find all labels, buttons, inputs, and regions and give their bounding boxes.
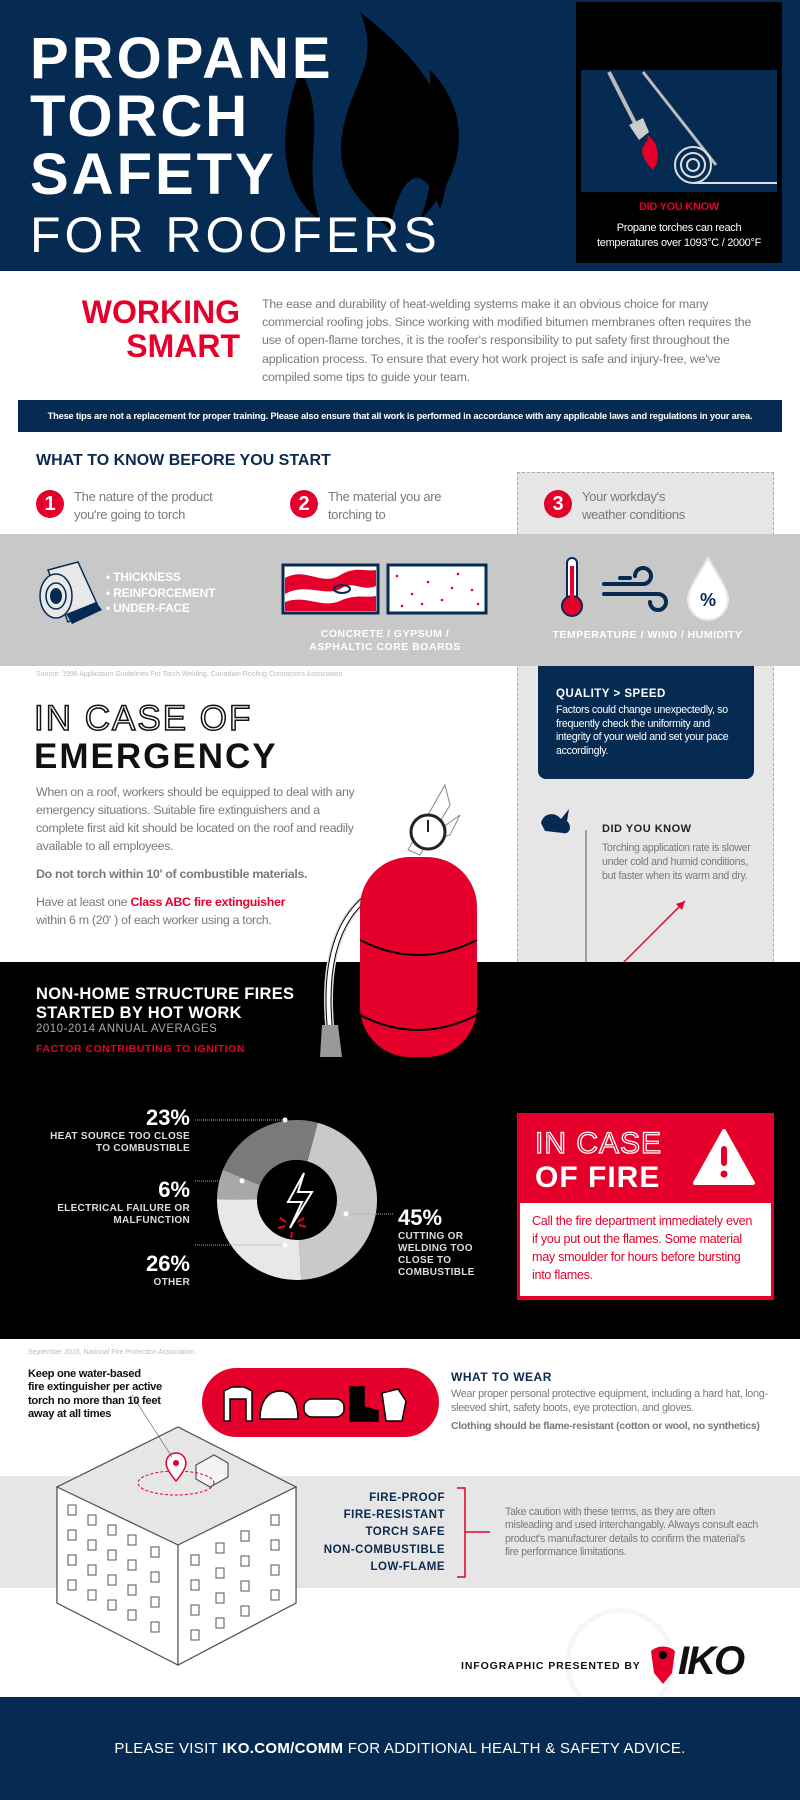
working smart heading: WORKING	[82, 294, 240, 330]
step 2: The material you are	[328, 489, 441, 504]
icon: membrane roll	[39, 561, 102, 624]
step 2: torching to	[328, 507, 385, 522]
label: 26%: OTHER	[154, 1277, 190, 1288]
source note: Source: 1996 Application Guidelines For Torch Welding, Canadian Roofing Contractors Association	[36, 671, 342, 678]
working smart heading	[82, 294, 240, 364]
text: roll properties	[106, 570, 216, 615]
in case of fire panel	[517, 1113, 774, 1300]
building illustration	[56, 1394, 298, 1666]
icon: warning	[693, 1128, 756, 1185]
label: 26%	[146, 1251, 190, 1288]
working smart heading: SMART	[126, 328, 240, 364]
did you know: rate chart: DID YOU KNOW	[602, 823, 692, 835]
did you know text	[597, 201, 761, 249]
column 3 background	[517, 472, 774, 1057]
title: FOR ROOFERS	[30, 207, 441, 263]
step 1: 1	[44, 493, 56, 515]
callout: keep extinguisher: fire extinguisher per active	[28, 1381, 162, 1393]
title: SAFETY	[30, 142, 277, 207]
intro paragraph: The ease and durability of heat-welding systems make it an obvious choice for many commercial roofing jobs. Since working with modified bitumen membranes often requires the use of open-flame torches, it is the roofer's responsibility to put safety first throughout the application process. To ensure that every hot work project is safe and injury-free, we've compiled some tips to guide your team.	[262, 297, 751, 384]
label: 45%: WELDING TOO	[398, 1243, 473, 1254]
PPE icons pill	[202, 1368, 439, 1437]
footer: PLEASE VISIT IKO.COM/COMM FOR ADDITIONAL HEALTH & SAFETY ADVICE.	[114, 1740, 686, 1757]
donut chart	[195, 1118, 393, 1280]
gray factors band	[0, 534, 800, 666]
label: 6%: MALFUNCTION	[113, 1215, 190, 1226]
icons: weather	[561, 556, 729, 621]
in case of emergency heading	[34, 699, 278, 776]
did you know: rate chart: Torching application rate is slower under cold and humid conditions, but faster when its warm and dry.	[602, 842, 750, 882]
caption: materials: CONCRETE / GYPSUM /	[321, 628, 449, 640]
icon: black flame	[285, 12, 459, 230]
label: 6%: ELECTRICAL FAILURE OR	[57, 1203, 190, 1214]
terms list: NON-COMBUSTIBLE	[324, 1544, 445, 1556]
heading: OF FIRE	[535, 1161, 660, 1194]
step 1: you're going to torch	[74, 507, 185, 522]
illustration: torch and roll	[581, 70, 777, 192]
terms list: TORCH SAFE	[365, 1526, 445, 1538]
IKO logo	[651, 1639, 744, 1684]
caption: weather: TEMPERATURE / WIND / HUMIDITY	[553, 629, 742, 641]
watermark seal	[565, 1608, 675, 1718]
callout: keep extinguisher: away at all times	[28, 1408, 111, 1420]
callout: keep extinguisher: torch no more than 10 feet	[28, 1395, 161, 1407]
terms list	[324, 1492, 445, 1573]
caution text: Take caution with these terms, as they are often misleading and used interchangably. Always consult each product's manufacturer details to confirm the material's fire performance limitations.	[505, 1506, 758, 1558]
text: Call the fire department immediately even if you put out the flames. Some material may smoulder for hours before bursting into flames.	[532, 1214, 752, 1282]
quality > speed box: Factors could change unexpectedly, so frequently check the uniformity and integrity of your weld and set your pace accordingly.	[556, 704, 728, 756]
text	[520, 1203, 771, 1296]
disclaimer bar: These tips are not a replacement for proper training. Please also ensure that all work is performed in accordance with any applicable laws and regulations in your area.	[48, 411, 752, 421]
label: 26%: 26%	[146, 1251, 190, 1276]
what to wear: Wear proper personal protective equipment, including a hard hat, long-sleeved shirt, safety boots, eye protection, and gloves.	[451, 1388, 768, 1414]
text: roll properties: • UNDER-FACE	[106, 601, 190, 615]
step 2	[290, 489, 441, 522]
IKO logo: IKO	[678, 1639, 743, 1683]
did you know: rate chart: ❄	[578, 1021, 594, 1043]
source note 2: September 2016, National Fire Protection Association	[28, 1349, 194, 1356]
label: 23%: HEAT SOURCE TOO CLOSE	[50, 1131, 190, 1142]
did you know text: Propane torches can reach	[617, 222, 741, 234]
label: 45%: 45%	[398, 1205, 442, 1230]
title: PROPANE	[30, 26, 334, 91]
in case of emergency heading: IN CASE OF	[34, 699, 252, 738]
emergency paragraph: When on a roof, workers should be equipped to deal with any emergency situations. Suitable fire extinguishers and a complete first aid kit should be located on the roof and readily available to all employees.	[36, 785, 354, 853]
what to know heading: WHAT TO KNOW BEFORE YOU START	[36, 452, 331, 469]
text: roll properties: • THICKNESS	[106, 570, 181, 584]
step 3: 3	[552, 493, 564, 515]
callout: keep extinguisher: Keep one water-based	[28, 1368, 141, 1380]
step 1	[36, 489, 213, 522]
label: 6%	[57, 1177, 190, 1226]
label: 6%: 6%	[158, 1177, 190, 1202]
emergency paragraph: Do not torch within 10' of combustible materials.	[36, 867, 307, 881]
icons: weather: %	[700, 590, 716, 610]
terms list: LOW-FLAME	[370, 1561, 445, 1573]
label: 23%: TO COMBUSTIBLE	[96, 1143, 190, 1154]
black stats panel	[0, 962, 800, 1339]
did you know text: temperatures over 1093°C / 2000°F	[597, 237, 761, 249]
did you know text: DID YOU KNOW	[639, 201, 719, 213]
emergency paragraph: within 6 m (20' ) of each worker using a torch.	[36, 913, 272, 927]
caption: materials: ASPHALTIC CORE BOARDS	[309, 640, 461, 652]
title: TORCH	[30, 84, 250, 149]
what to wear	[451, 1370, 768, 1432]
label: 45%	[398, 1205, 475, 1278]
heading: IN CASE	[535, 1127, 662, 1160]
label: 45%: CLOSE TO	[398, 1255, 451, 1266]
step 1: The nature of the product	[74, 489, 212, 504]
presented by: INFOGRAPHIC PRESENTED BY	[461, 1660, 641, 1672]
emergency paragraph: Have at least one Class ABC fire extinguisher	[36, 895, 285, 909]
icon: substrate boards	[282, 564, 488, 614]
quality > speed box	[538, 666, 754, 779]
what to wear: WHAT TO WEAR	[451, 1370, 552, 1384]
step 3: weather conditions	[582, 507, 685, 522]
stats heading: NON-HOME STRUCTURE FIRES	[36, 985, 294, 1003]
fire extinguisher illustration	[320, 784, 478, 1057]
stats heading	[36, 985, 294, 1022]
callout: keep extinguisher	[28, 1368, 162, 1420]
label: 45%: CUTTING OR	[398, 1231, 463, 1242]
step 2: 2	[298, 493, 310, 515]
text: roll properties: • REINFORCEMENT	[106, 586, 215, 600]
caption: materials	[309, 628, 461, 652]
quality > speed box: QUALITY > SPEED	[556, 688, 666, 700]
stats heading: STARTED BY HOT WORK	[36, 1004, 242, 1022]
in case of emergency heading: EMERGENCY	[34, 737, 278, 776]
heading	[535, 1127, 662, 1194]
stats subheading: 2010-2014 ANNUAL AVERAGES	[36, 1023, 217, 1035]
label: 23%: 23%	[146, 1105, 190, 1130]
header panel	[0, 0, 800, 271]
did you know: rate chart	[541, 809, 751, 1043]
step 3	[544, 489, 685, 522]
terms list: FIRE-PROOF	[369, 1492, 445, 1504]
label: 23%	[50, 1105, 190, 1154]
disclaimer bar	[18, 400, 782, 432]
title	[30, 26, 441, 263]
footer	[0, 1697, 800, 1800]
did you know box: torch	[576, 2, 782, 263]
what to wear: Clothing should be flame-resistant (cotton or wool, no synthetics)	[451, 1420, 760, 1432]
label: 45%: COMBUSTIBLE	[398, 1267, 475, 1278]
bracket	[457, 1487, 490, 1578]
gray terms band	[0, 1476, 800, 1588]
factor label: FACTOR CONTRIBUTING TO IGNITION	[36, 1043, 245, 1055]
emergency paragraph	[36, 785, 355, 927]
terms list: FIRE-RESISTANT	[344, 1509, 445, 1521]
step 3: Your workday's	[582, 489, 665, 504]
